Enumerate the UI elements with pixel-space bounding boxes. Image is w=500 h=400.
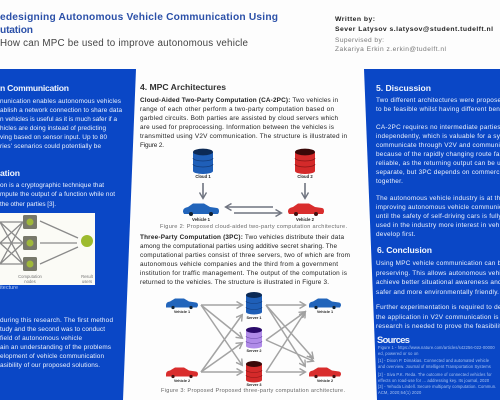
text block: sources: effects on road-use for ... addressing key. Its journal, 2020	[378, 378, 490, 383]
text block: communication: ablish a network connection to share data	[0, 107, 122, 114]
cloud 1	[193, 149, 213, 179]
arrows: cloud to vehicle and V2V	[203, 183, 305, 213]
vehicle 2 left: Vehicle 2	[174, 379, 190, 383]
text block: discussion: together.	[376, 178, 403, 185]
vehicle 1 left: Vehicle 1	[174, 310, 190, 314]
text block: communication: hicles are doing instead of predicting	[0, 125, 106, 132]
text block: methodology: tudy and the second was to conduct	[0, 326, 105, 333]
panel: left column	[0, 69, 136, 400]
text block: methodology: ain an understanding of the problems	[0, 344, 111, 351]
server 3	[246, 361, 262, 387]
text block: methodology: elopment of vehicle communication	[0, 353, 104, 360]
heading: computation: ation	[0, 168, 20, 178]
title: edesigning Autonomous Vehicle Communication Using	[0, 12, 278, 23]
heading: MPC architectures: 4. MPC Architectures	[140, 82, 226, 92]
cloud 2	[295, 149, 315, 179]
text block: conclusion: safer and more environmentally friendly.	[376, 289, 499, 296]
text block: communication	[0, 98, 122, 150]
server 1: Server 1	[246, 316, 262, 320]
authors: Written by:	[335, 16, 375, 23]
authors: Supervised by:	[335, 37, 384, 44]
figure 1: network: Result	[81, 274, 94, 279]
text block: CA-2PC: transmitted using V2V communication. The structure is illustrated in	[140, 133, 347, 140]
text block: 3PC: autonomous vehicle companies and the third from a government	[140, 261, 338, 268]
panel: right column	[364, 69, 500, 400]
text block: sources: [2] - Siva P.K. Reda. The outcome of connected vehicles for	[378, 372, 492, 377]
text block: sources	[378, 345, 496, 395]
vehicle 2 left	[166, 368, 198, 383]
text block: sources: [1] - Dixon P. Dimakias. Connected and automated vehicle	[378, 358, 490, 363]
figure 2 caption: Figure 2: Proposed cloud-aided two-party computation architecture.	[160, 224, 347, 230]
vehicle 1 left	[166, 298, 198, 314]
text block: CA-2PC: are used for preprocessing. Information between the vehicles is	[140, 124, 334, 131]
vehicle 2 right: Vehicle 2	[317, 379, 333, 383]
server 2: Server 2	[246, 349, 262, 353]
text block: discussion	[376, 97, 500, 238]
text block: conclusion	[376, 260, 500, 330]
heading: conclusion: 6. Conclusion	[377, 245, 432, 255]
subtitle: How can MPC be used to improve autonomous vehicle	[0, 38, 249, 49]
figure 1: network: users	[82, 279, 92, 284]
panel: MPC architectures	[140, 82, 350, 394]
text block: methodology: asibility of our proposed solutions.	[0, 362, 100, 369]
vehicle 1: Vehicle 1	[192, 217, 211, 222]
text block: sources: ACM, 2020;64(1) 2020	[378, 390, 422, 395]
heading: sources: Sources	[377, 334, 410, 345]
vehicle 1	[183, 204, 219, 222]
text block: sources: Figure 1 - https://www.nature.com/articles/s42256-022-00000	[378, 345, 495, 350]
text block: communication: n vehicles is useful as it is much safer if a	[0, 116, 117, 123]
text block: computation: mpute the output of a function while not	[0, 191, 115, 198]
figure 3: three-party architecture	[161, 292, 345, 394]
cloud 1: Cloud 1	[195, 174, 211, 179]
authors: Zakariya Erkin z.erkin@tudelft.nl	[335, 46, 447, 53]
cloud 2: Cloud 2	[297, 174, 313, 179]
text block: CA-2PC: range of each other perform a two-party computation based on	[140, 106, 334, 113]
text block: computation: on is a cryptographic technique that	[0, 182, 104, 189]
vehicle 1 right: Vehicle 1	[317, 310, 333, 314]
figure 1 caption: itecture	[0, 285, 18, 291]
text block: methodology	[0, 317, 113, 369]
figure 1: network	[0, 213, 95, 285]
figure 1: network: Computation	[18, 274, 43, 279]
text block: computation: the other parties [3].	[0, 201, 56, 208]
authors: Sever Latysov s.latysov@student.tudelft.nl	[335, 26, 493, 33]
figure 2: cloud-aided architecture	[160, 149, 347, 230]
text block: discussion: develop first.	[376, 231, 416, 238]
heading: discussion: 5. Discussion	[376, 83, 431, 93]
title	[0, 12, 278, 36]
server 1	[246, 292, 262, 320]
heading: communication: n Communication	[0, 83, 69, 93]
text block: 3PC: returned to the vehicles. The structure is illustrated in Figure 3.	[140, 279, 329, 286]
text block: CA-2PC: Figure 2.	[140, 142, 164, 149]
text block: CA-2PC: garbled circuits. Both parties are assisted by cloud servers which	[140, 115, 338, 122]
text block: CA-2PC: Cloud-Aided Two-Party Computation (CA-2PC): Two vehicles in	[140, 97, 338, 104]
text block: 3PC: Three-Party Computation (3PC): Two vehicles distribute their data	[140, 234, 344, 241]
vehicle 2	[288, 204, 324, 222]
text block: 3PC	[140, 234, 350, 286]
text block: 3PC: among the computational parties using additive secret sharing. The	[140, 243, 337, 250]
text block: 3PC: institution for traffic management. The output of the computation is	[140, 270, 347, 277]
text block: CA-2PC	[140, 97, 347, 149]
text block: sources: ed, powered or so on	[378, 351, 419, 356]
figure 3 caption: Figure 3: Proposed Proposed three-party computation architecture.	[161, 388, 345, 394]
text block: 3PC: computational parties consist of three servers, two of which are from	[140, 252, 350, 259]
text block: sources: [3] - Yehuda Lindell. Secure multiparty computation. Commun.	[378, 384, 496, 389]
text block: communication: ries' scenarios could potentially be	[0, 143, 101, 150]
text block: communication: ving based on sensor input. Up to 80	[0, 134, 107, 141]
text block: communication: nunication enables autonomous vehicles	[0, 98, 121, 105]
text block: methodology: field of autonomous vehicle	[0, 335, 82, 342]
server 2	[246, 327, 262, 353]
text block: computation	[0, 182, 115, 208]
authors	[335, 16, 493, 53]
text block: methodology: during this research. The first method	[0, 317, 113, 324]
vehicle 1 right	[309, 298, 341, 314]
figure 1: network: nodes	[24, 279, 36, 284]
arrows: vehicles to servers to vehicles	[201, 305, 313, 372]
vehicle 2 right	[309, 368, 341, 383]
server 3: Server 3	[246, 383, 262, 387]
title: utation	[0, 25, 33, 36]
text block: sources: and overview. Journal of Intelligent Transportation Systems	[378, 364, 491, 369]
vehicle 2: Vehicle 2	[296, 217, 315, 222]
